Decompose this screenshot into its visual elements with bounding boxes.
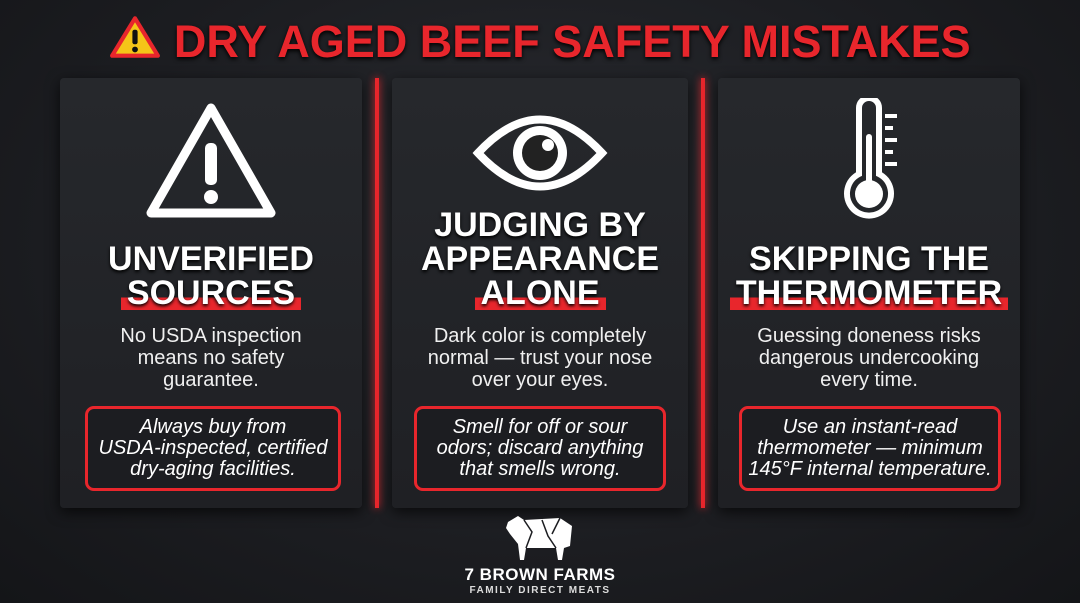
callout: dry-aging facilities. <box>130 458 296 480</box>
panel: unverified sources <box>60 78 362 508</box>
heading: JUDGING BY <box>434 206 646 244</box>
callout: that smells wrong. <box>459 458 621 480</box>
logo: FAMILY DIRECT MEATS <box>469 585 611 596</box>
text: guarantee. <box>163 369 259 391</box>
heading <box>421 206 659 312</box>
title: DRY AGED BEEF SAFETY MISTAKES <box>174 16 971 67</box>
callout: Use an instant-read <box>783 416 957 438</box>
callout: odors; discard anything <box>437 437 643 459</box>
text <box>757 325 981 391</box>
heading: ALONE <box>480 274 600 312</box>
text: Dark color is completely <box>434 325 646 347</box>
callout <box>739 406 1001 491</box>
divider line <box>701 78 705 508</box>
logo <box>464 516 616 596</box>
callout: Smell for off or sour <box>453 416 627 438</box>
callout <box>414 406 666 491</box>
heading: SOURCES <box>127 274 295 312</box>
text <box>428 325 652 391</box>
panel: thermometer <box>718 78 1020 508</box>
callout: USDA-inspected, certified <box>98 437 327 459</box>
callout: Always buy from <box>140 416 286 438</box>
panel: appearance <box>392 78 688 508</box>
heading: APPEARANCE <box>421 240 659 278</box>
divider line <box>375 78 379 508</box>
icon: thermometer <box>844 98 897 219</box>
heading: THERMOMETER <box>736 274 1002 312</box>
text: No USDA inspection <box>120 325 302 347</box>
callout: 145°F internal temperature. <box>748 458 992 480</box>
text: over your eyes. <box>472 369 608 391</box>
text: Guessing doneness risks <box>757 325 981 347</box>
text: every time. <box>820 369 918 391</box>
heading <box>730 240 1008 312</box>
text: means no safety <box>138 347 284 369</box>
brand text: 7 BROWN FARMS <box>464 565 616 584</box>
icon: eye <box>472 116 608 190</box>
icon: warning triangle <box>146 104 276 218</box>
icon: warning <box>110 16 160 58</box>
icon: bull <box>506 516 572 560</box>
heading <box>108 240 314 312</box>
text: dangerous undercooking <box>759 347 979 369</box>
callout: thermometer — minimum <box>757 437 983 459</box>
heading: SKIPPING THE <box>749 240 989 278</box>
callout <box>85 406 341 491</box>
heading: UNVERIFIED <box>108 240 314 278</box>
text <box>120 325 302 391</box>
text: normal — trust your nose <box>428 347 652 369</box>
